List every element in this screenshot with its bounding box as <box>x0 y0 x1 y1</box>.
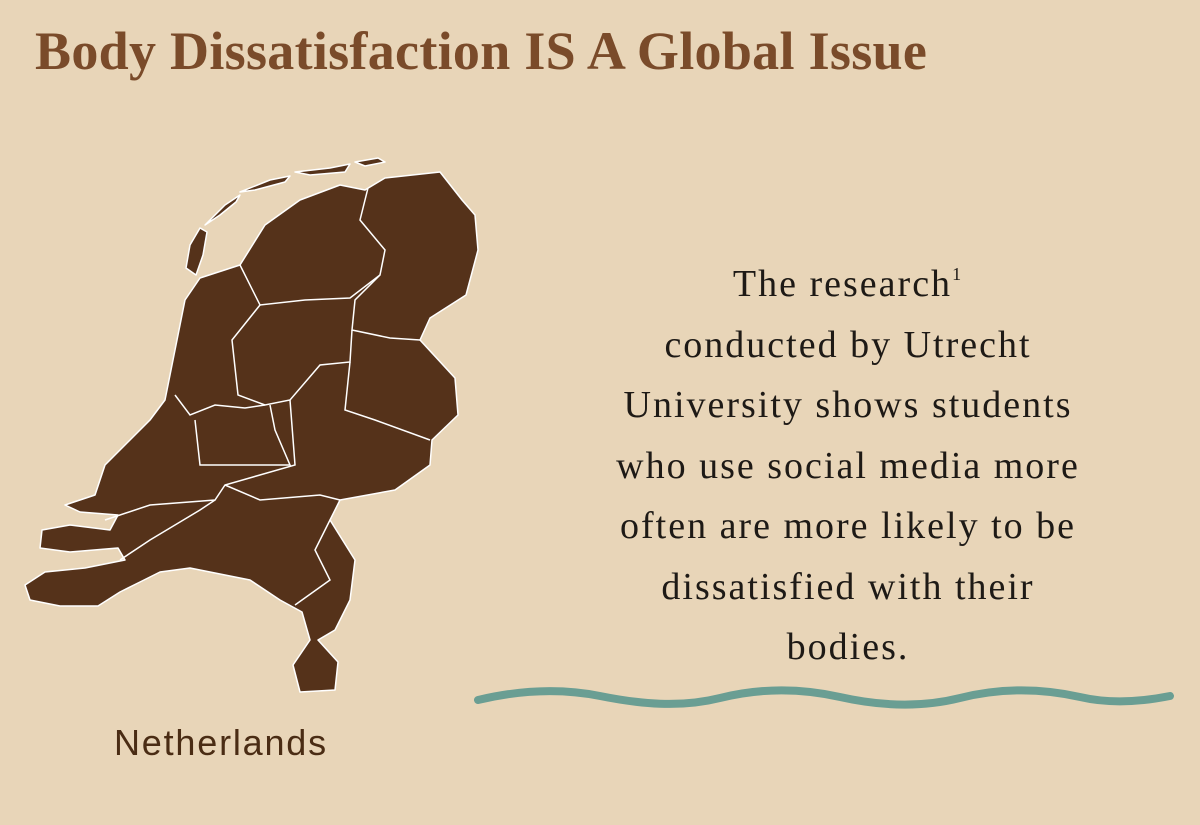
text block: conducted by Utrecht <box>664 324 1032 366</box>
text block: The research1 <box>733 263 963 305</box>
label: Netherlands: Netherlands <box>114 722 328 763</box>
text block <box>616 263 1080 668</box>
text block: dissatisfied with their <box>661 566 1035 608</box>
text block: who use social media more <box>616 444 1080 486</box>
text block: University shows students <box>624 384 1072 426</box>
text block: often are more likely to be <box>620 505 1076 547</box>
title: Body Dissatisfaction IS A Global Issue <box>35 21 927 81</box>
text block: bodies. <box>787 626 909 668</box>
wave <box>478 690 1170 705</box>
